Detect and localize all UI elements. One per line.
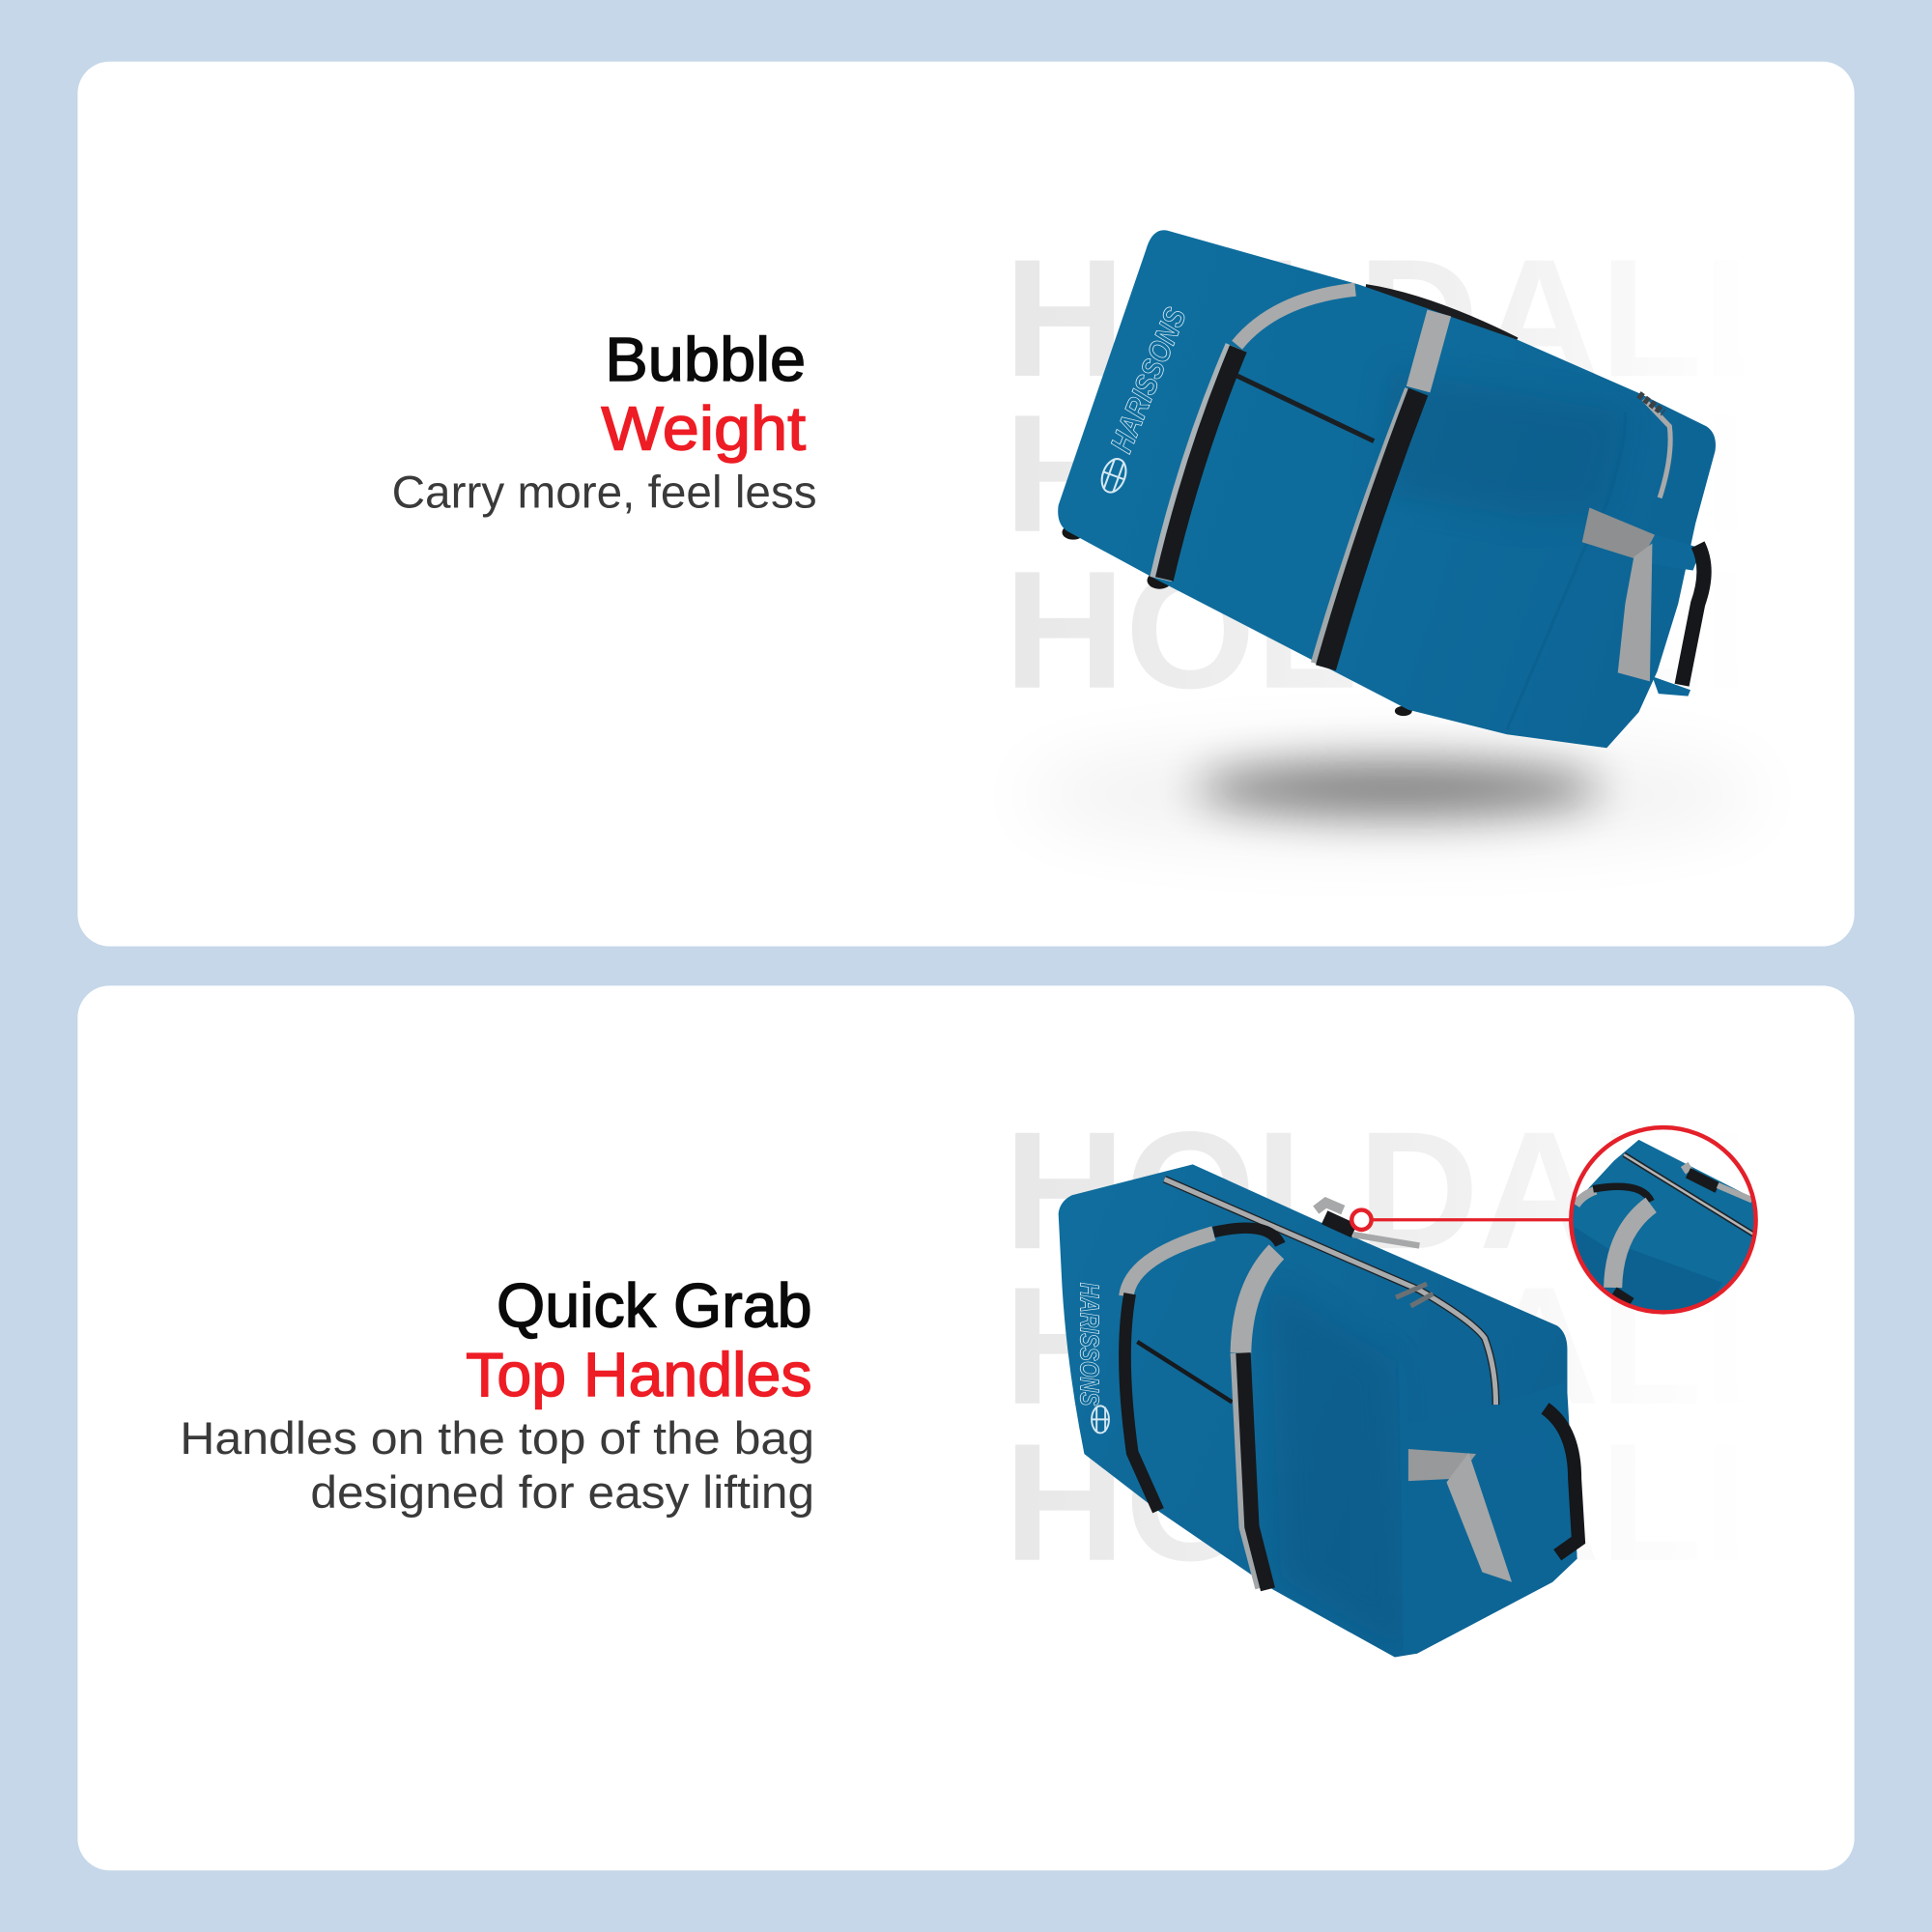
back handle	[1365, 290, 1516, 343]
bag body	[1058, 230, 1716, 748]
side handle	[1408, 1408, 1578, 1582]
text: tagline: Carry more, feel less	[392, 468, 817, 519]
pocket zip line	[1137, 1342, 1233, 1403]
logo mark	[1097, 456, 1130, 496]
bag body	[1059, 1164, 1577, 1658]
bag wheels	[1062, 525, 1412, 716]
zipper	[1644, 399, 1670, 497]
text: description	[180, 1413, 814, 1519]
shadow under bag	[1023, 748, 1762, 841]
connector line	[1372, 1219, 1573, 1221]
callout marker	[1351, 1210, 1372, 1230]
heading: Quick Grab Top Handles: Quick Grab	[497, 1271, 812, 1341]
seam: front to side edge	[1507, 412, 1625, 729]
panel: bubble weight	[77, 62, 1855, 947]
watermark: HOLDALL text: HOLDALL	[1005, 1252, 1804, 1439]
right strap	[1322, 313, 1439, 668]
panel: top handles	[77, 985, 1855, 1870]
logo on bag: HARISSONS	[1103, 302, 1193, 457]
watermark: HOLDALL text: HOLDALL	[1005, 224, 1804, 412]
logo mark	[1092, 1406, 1109, 1433]
side handle	[1582, 508, 1704, 696]
front face shading	[1399, 388, 1604, 502]
heading: Quick Grab Top Handles	[466, 1271, 812, 1409]
zipper pulls	[1396, 1284, 1433, 1306]
text: description: designed for easy lifting	[310, 1467, 814, 1519]
zipper	[1164, 1179, 1495, 1405]
product: tilted blue holdall bag	[1058, 230, 1716, 748]
magnified detail	[1573, 1140, 1754, 1310]
callout ring	[1571, 1127, 1756, 1312]
side face	[1399, 1359, 1577, 1654]
zipper pulls	[1638, 394, 1663, 412]
watermark: HOLDALL text: HOLDALL	[1005, 1408, 1804, 1596]
watermark: HOLDALL text	[1005, 224, 1804, 724]
heading: Bubble Weight: Bubble	[605, 325, 806, 394]
watermark: HOLDALL text	[1005, 1096, 1804, 1596]
right strap	[1239, 1252, 1276, 1589]
left strap	[1161, 290, 1355, 579]
front face shading	[1281, 1309, 1383, 1609]
callout: zoomed handle detail	[1351, 1122, 1762, 1319]
heading: Quick Grab Top Handles: Top Handles	[466, 1340, 812, 1409]
heading: Bubble Weight	[601, 325, 806, 464]
watermark: HOLDALL text: HOLDALL	[1005, 1096, 1804, 1284]
product: blue holdall bag	[1059, 1164, 1578, 1658]
logo on bag: HARISSONS	[1075, 1283, 1105, 1406]
watermark: HOLDALL text: HOLDALL	[1005, 380, 1804, 567]
pocket zip line	[1237, 376, 1374, 441]
left strap	[1124, 1228, 1280, 1511]
heading: Bubble Weight: Weight	[601, 394, 806, 464]
text: description: Handles on the top of the bag	[180, 1413, 814, 1464]
watermark: HOLDALL text: HOLDALL	[1005, 536, 1804, 724]
top handle	[1316, 1203, 1419, 1246]
